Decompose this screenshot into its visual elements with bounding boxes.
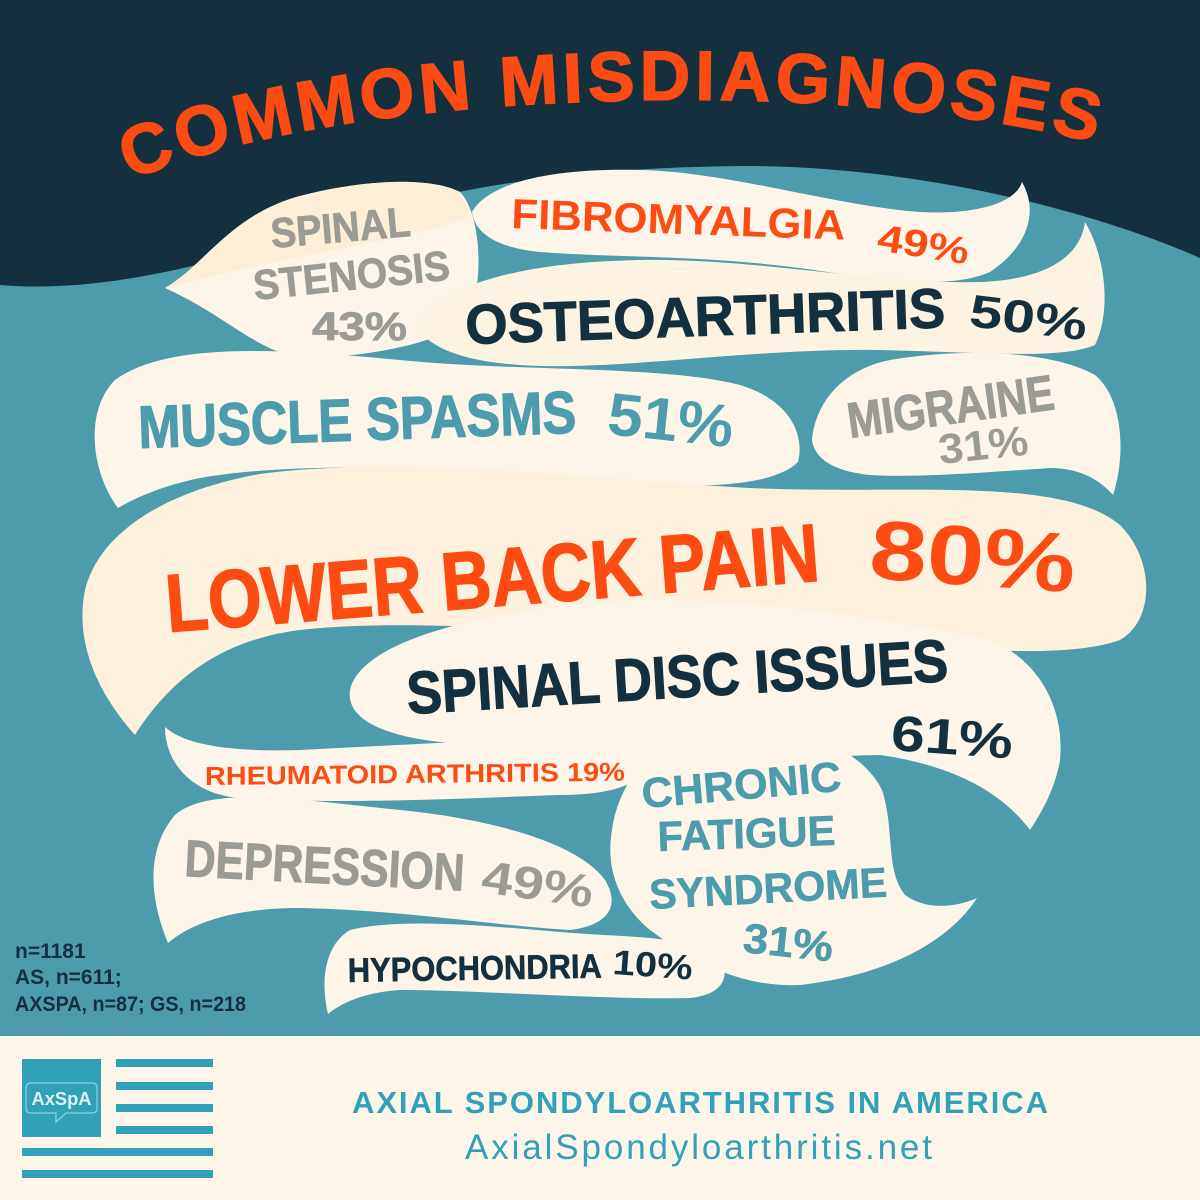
text: hypochondria: HYPOCHONDRIA <box>347 948 602 990</box>
panel: spinal disc issues <box>350 600 1061 830</box>
text: 31%: 31% <box>936 417 1030 473</box>
text: spinal disc issues: SPINAL DISC ISSUES <box>405 627 950 727</box>
panel: lower back pain <box>82 467 1146 735</box>
text: chronic fatigue syndrome: SYNDROME <box>648 859 888 918</box>
text: spinal stenosis <box>251 198 452 349</box>
panel: depression <box>153 797 612 943</box>
text: depression: DEPRESSION <box>183 830 466 903</box>
background: navy wave <box>0 0 1200 287</box>
text: chronic fatigue syndrome: CHRONIC <box>640 753 843 817</box>
text: spinal stenosis: 43% <box>312 305 407 349</box>
text: 10%: 10% <box>611 943 694 988</box>
text: lower back pain: LOWER BACK PAIN <box>162 508 822 650</box>
text: fibromyalgia: FIBROMYALGIA <box>511 190 846 249</box>
sample sizes note: AXSPA, n=87; GS, n=218 <box>15 993 246 1016</box>
panel: hypochondria <box>324 924 725 1014</box>
panel: fibromyalgia <box>472 170 1030 282</box>
text: chronic fatigue syndrome: FATIGUE <box>657 807 836 860</box>
text: 80%: 80% <box>867 502 1079 610</box>
text: chronic fatigue syndrome: 31% <box>741 914 835 970</box>
text: muscle spasms: MUSCLE SPASMS <box>137 379 577 461</box>
icon: flag logo: AxSpA <box>32 1089 92 1109</box>
text: chronic fatigue syndrome <box>640 753 888 970</box>
title: COMMON MISDIAGNOSES <box>121 50 1100 174</box>
panel: osteoarthritis <box>416 222 1105 366</box>
text: 49%: 49% <box>479 850 597 917</box>
panel: migraine <box>812 353 1120 495</box>
panel: chronic fatigue syndrome <box>610 724 977 985</box>
text: 50%: 50% <box>967 284 1090 350</box>
text: migraine: MIGRAINE <box>844 364 1058 449</box>
footer heading: AXIAL SPONDYLOARTHRITIS IN AMERICA <box>352 1085 1048 1120</box>
text: osteoarthritis: OSTEOARTHRITIS <box>464 276 946 356</box>
footer url: AxialSpondyloarthritis.net <box>465 1128 932 1167</box>
text: rheumatoid arthritis: RHEUMATOID ARTHRITIS 19% <box>205 757 625 791</box>
sample sizes note: AS, n=611; <box>15 966 122 989</box>
text: 51%: 51% <box>605 380 737 460</box>
text: 61%: 61% <box>889 705 1015 769</box>
text: 49%: 49% <box>875 217 972 273</box>
text: spinal stenosis: STENOSIS <box>251 242 452 309</box>
panel: rheumatoid arthritis <box>165 727 650 801</box>
text: spinal stenosis: SPINAL <box>269 198 412 257</box>
sample sizes note: n=1181 <box>15 940 86 963</box>
sample sizes note <box>15 940 246 1016</box>
panel: spinal stenosis <box>165 182 478 358</box>
panel: muscle spasms <box>95 351 800 508</box>
footer band <box>0 1036 1200 1200</box>
icon: flag logo <box>22 1059 213 1178</box>
